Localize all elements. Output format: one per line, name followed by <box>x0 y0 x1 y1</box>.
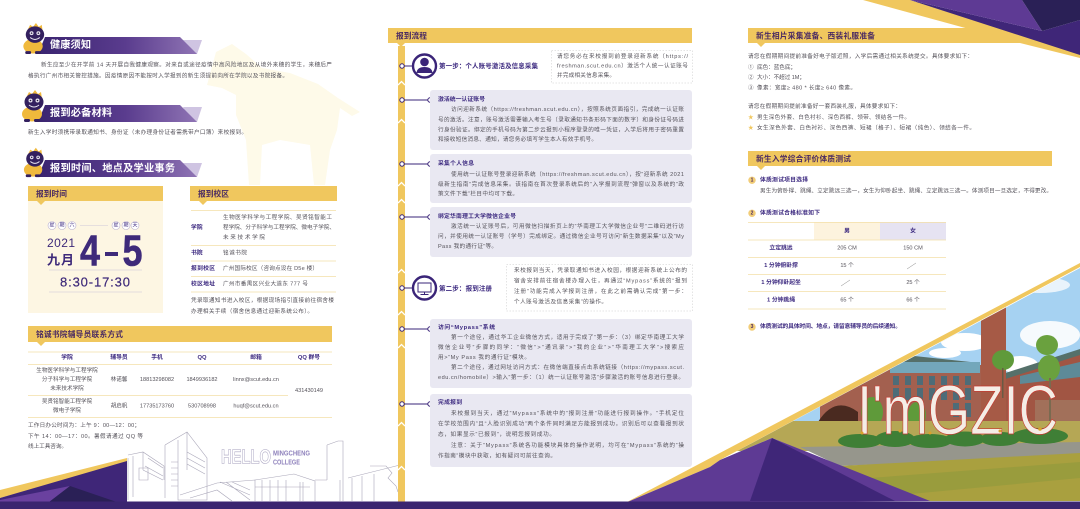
card: 完成报到 <box>430 394 692 467</box>
heading: 报到必备材料 <box>22 90 202 122</box>
panel: 报到校区: 凭录取通知书进入校区，根据现场指引直接前往宿舍楼 <box>191 296 334 304</box>
weekdays: 星 <box>49 222 55 228</box>
contact table: 胡启帆 <box>111 402 128 410</box>
step 2 title: 第二步：报到注册 <box>439 284 492 292</box>
card: 访问 Mypass 系统 <box>430 319 692 388</box>
contact table: 学院 <box>61 353 73 361</box>
watermark: horse <box>207 44 360 185</box>
right panel <box>748 28 1052 331</box>
suit requirements: 男生深色外套、白色衬衫、深色西裤、领带、领结各一件。 <box>757 113 910 121</box>
contact table: 林诺馨 <box>111 375 128 383</box>
office hours note: 下午 14：00—17：00。暑假请通过 QQ 等 <box>28 432 143 440</box>
item 1: 1 <box>751 177 754 183</box>
contact table: linnx@scut.edu.cn <box>233 377 279 383</box>
step 1 note <box>552 50 692 83</box>
card: 完成报到: 完成报到 <box>438 398 462 406</box>
bottom-left corner shapes <box>0 458 137 509</box>
card: 完成报到: 注意：关于“Mypass”系统各功能模块具体的操作说明，均可在“Mypass”系统的“操 <box>451 441 684 449</box>
panel: 报到时间: 8:30-17:30 <box>60 274 130 290</box>
contact table <box>28 352 332 418</box>
center panel <box>388 28 692 502</box>
card: 完成报到: 态，如果显示“已报到”，说明您报到成功。 <box>438 430 555 438</box>
office hours note: 线上工具咨询。 <box>28 442 67 450</box>
panel: 报到校区: 学院 <box>191 223 203 231</box>
weekdays: 星 <box>113 222 119 228</box>
fitness standards table: 25 个 <box>906 279 920 286</box>
photo requirements: ② <box>748 73 754 81</box>
HELLO outline lettering: HELLO <box>221 446 271 468</box>
panel: 报到校区: 程学院、分子科学与工程学院、微电子学院、 <box>223 223 335 231</box>
weekdays <box>48 222 139 230</box>
suit requirements <box>748 102 975 132</box>
card: 完成报到: 作指南”模块中获取，如有疑问可前往查询。 <box>438 452 556 460</box>
card: 采集个人信息 <box>430 154 692 203</box>
fitness standards table <box>748 222 946 309</box>
contact table: 生物医学科学与工程学院 <box>36 366 98 374</box>
heading: 报到时间、地点及学业事务 <box>24 148 202 177</box>
campus photo <box>737 268 1080 501</box>
card: 绑定华南理工大学微信企业号 <box>430 207 692 257</box>
card: 绑定华南理工大学微信企业号: 问，并使用统一认证账号（学号）完成绑定。通过微信企业号可访问“新生数据采集”以及“My <box>438 232 684 240</box>
contact table: huqf@scut.edu.cn <box>233 404 279 410</box>
panel: 报到时间: 九月 <box>47 252 74 268</box>
panel: 报到时间 <box>28 186 163 313</box>
card: 采集个人信息: 级新生指南”完成信息采集。该指南在首次登录系统后的“入学报到流程”弹窗以及系统的“政 <box>438 180 684 188</box>
heading: 新生相片采集准备、西装礼服准备 <box>748 28 1025 47</box>
card: 访问 Mypass 系统: 微信企业号”步骤的同学：“微信”>“通讯录”>“我的企业”>“华南理工大学”>搜索应 <box>438 343 684 351</box>
card: 访问 Mypass 系统: 第二个途径，通过网址访问方式：在微信端直接点击系统链接（https://mypass.scut. <box>451 363 684 371</box>
card: 完成报到: 在学校范围内”且“人脸识别成功”两个条件同时满足方能报到成功，识别后可以查看报到状 <box>438 420 684 428</box>
step 1 note: freshman.scut.edu.cn）激活个人统一认证账号 <box>557 62 688 70</box>
health text: 新生应至少在开学前 14 天开展自我健康观察。对来自或途径疫情中高风险地区及从境外来穗的学生，来穗后严 <box>41 60 332 68</box>
step 2 note: 个人账号激活及信息采集”的操作。 <box>514 298 607 306</box>
materials text: 新生入学时须携带录取通知书、身份证（未办理身份证者需携带户口簿）来校报到。 <box>28 128 247 136</box>
photo requirements: 像素：宽度≥ 480 * 长度≥ 640 像素。 <box>757 84 856 92</box>
contact table: 辅导员 <box>110 353 128 361</box>
item 3: 3 <box>751 324 754 330</box>
timeline strip <box>398 46 432 502</box>
card: 绑定华南理工大学微信企业号: 绑定华南理工大学微信企业号 <box>438 212 516 220</box>
item 3 <box>748 322 901 331</box>
date: 4–5: 4 <box>80 226 100 276</box>
panel: 报到校区: 报到校区 <box>191 264 215 272</box>
office hours note <box>28 421 143 450</box>
card: 完成报到: 来校报到当天，通过“Mypass”系统中的“报到注册”功能进行报到操作。“手机定位 <box>451 409 684 417</box>
card: 激活统一认证账号 <box>430 90 692 150</box>
suit requirements: 请您在假期期间提前准备好一套西装礼服，具体要求如下： <box>748 102 901 110</box>
left panel <box>22 23 337 450</box>
card: 绑定华南理工大学微信企业号: Pass 我的通行证”等。 <box>438 242 497 250</box>
photo requirements: 请您在假期期间提前准备好电子版近照，入学后需通过相关系统提交。具体要求如下： <box>748 52 973 60</box>
photo requirements: ③ <box>748 84 754 92</box>
panel: 报到校区: 办理相关手续（宿舍信息通过迎新系统公布）。 <box>191 307 313 315</box>
panel: 报到校区: 广州市番禺区兴业大道东 777 号 <box>223 280 308 288</box>
contact table: 1849936182 <box>186 377 218 383</box>
MINGCHENG COLLEGE: MINGCHENG <box>273 448 310 458</box>
step 1 note: 请您务必在来校报到前登录迎新系统（https:// <box>557 52 688 60</box>
step 1 title: 第一步：个人账号激活及信息采集 <box>439 61 538 70</box>
date: 4–5: 5 <box>122 226 142 276</box>
icon: monitor <box>413 276 436 300</box>
fitness standards table: 立定跳远 <box>769 244 793 252</box>
bottom band <box>0 502 1080 509</box>
item 2: 2 <box>751 210 754 216</box>
panel: 铭诚书院辅导员联系方式 <box>28 326 332 450</box>
panel: 报到校区: 铭诚书院 <box>223 248 247 256</box>
icon: person <box>413 54 436 78</box>
heading: 健康须知 <box>23 23 202 54</box>
weekdays: 六 <box>69 222 75 228</box>
suit requirements: 女生深色外套、白色衬衫、深色西裤、短裙（格子）、短裙（纯色）、领结各一件。 <box>757 124 975 132</box>
item 1: 男生为俯卧撑、跳绳、立定跳远三选一，女生为仰卧起坐、跳绳、立定跳远三选一。体测项目一旦选定，不得更改。 <box>760 186 1052 194</box>
panel: 报到校区: 报到校区 <box>198 188 229 198</box>
suit requirements: ★ <box>748 126 754 132</box>
card: 访问 Mypass 系统: 访问“Mypass”系统 <box>438 323 495 331</box>
MINGCHENG COLLEGE <box>273 448 310 466</box>
office hours note: 工作日办公时间为：上午 9：00—12：00； <box>28 421 140 429</box>
heading: 报到流程: 报到流程 <box>396 30 427 40</box>
card: 激活统一认证账号: 访问迎新系统（https://freshman.scut.edu.cn），按照系统页面指引，完成统一认证账 <box>451 105 684 113</box>
fitness standards table: 65 个 <box>840 296 854 304</box>
card: 访问 Mypass 系统: edu.cn/homobile）>输入“第一步：（1）统一认证账号激活”步骤激活的账号信息进行登录。 <box>438 373 684 381</box>
step 2 note: 来校报到当天，凭录取通知书进入校园，根据迎新系统上公布的 <box>514 266 687 274</box>
contact table: 未来技术学院 <box>50 384 84 392</box>
city line art <box>128 432 400 501</box>
MINGCHENG COLLEGE: COLLEGE <box>273 458 300 466</box>
step 2 note: 注册”功能完成入学报到注册，在此之前需确认完成“第一步： <box>514 287 687 295</box>
contact table: 18813298082 <box>140 377 174 383</box>
panel: 报到时间: 2021 <box>47 236 75 250</box>
health text: 格执行广州市相关管控措施。因疫情原因不能按时入学报到的新生须提前向所在学院以及书院报备。 <box>28 71 288 79</box>
weekdays: 天 <box>132 222 138 228</box>
fitness standards table: 男 <box>844 228 850 234</box>
contact table: 分子科学与工程学院 <box>42 375 93 383</box>
contact table: QQ <box>197 355 207 361</box>
card: 访问 Mypass 系统: 用>“My Pass 我的通行证”模块。 <box>438 353 530 361</box>
heading: 健康须知: 健康须知 <box>50 38 91 51</box>
heading: 报到流程 <box>388 28 692 47</box>
item 3: 体质测试的具体时间、地点，请留意辅导员的后续通知。 <box>760 322 901 330</box>
photo requirements <box>748 52 973 92</box>
heading: 新生相片采集准备、西装礼服准备: 新生相片采集准备、西装礼服准备 <box>756 30 875 40</box>
date: 4–5 <box>80 226 142 276</box>
contact table: 431430149 <box>295 388 323 394</box>
panel: 报到校区: 未来技术学院 <box>223 233 265 241</box>
card: 采集个人信息: 采集个人信息 <box>438 159 474 167</box>
item 1 <box>748 175 1052 194</box>
contact table: QQ 群号 <box>298 353 320 361</box>
suit requirements: ★ <box>748 115 754 121</box>
fitness standards table: 15 个 <box>840 262 854 269</box>
contact table: 微电子学院 <box>53 406 81 414</box>
panel: 报到校区 <box>190 186 337 315</box>
fitness standards table: 205 CM <box>837 246 857 252</box>
step 2 note <box>506 264 692 311</box>
card: 激活统一认证账号: 激活统一认证账号 <box>438 95 485 103</box>
step 2 note: 宿舍安排前往宿舍楼办理入住，再通过“Mypass”系统的“报到 <box>514 276 687 284</box>
panel: 铭诚书院辅导员联系方式: 铭诚书院辅导员联系方式 <box>36 329 123 339</box>
photo requirements: 大小：不超过 1M； <box>757 73 805 81</box>
card: 采集个人信息: 策文件下载”栏目中均可下载。 <box>438 190 518 198</box>
card: 访问 Mypass 系统: 第一个途径，通过华工企业微信方式，适用于完成了“第一步：（3）绑定华南理工大学 <box>451 333 684 341</box>
fitness standards table: 1 分钟跳绳 <box>767 296 795 304</box>
step 1 note: 并完成相关信息采集。 <box>557 71 615 79</box>
contact table: 手机 <box>151 353 163 361</box>
heading: 新生入学综合评价体质测试 <box>748 151 1052 170</box>
fitness standards table: 1 分钟俯卧撑 <box>764 261 798 269</box>
card: 绑定华南理工大学微信企业号: 激活统一认证账号后，可用微信扫描折页上的“华南理工大学微信企业号”二维码进行访 <box>451 222 684 230</box>
item 2: 体质测试合格标准如下 <box>760 208 820 216</box>
fitness standards table: 女 <box>910 226 916 234</box>
panel: 报到校区: 书院 <box>191 248 203 256</box>
panel: 报到校区: 校区地址 <box>191 280 215 288</box>
panel: 报到时间: 报到时间 <box>36 188 67 198</box>
heading: 报到必备材料: 报到必备材料 <box>50 106 112 119</box>
photo requirements: ① <box>748 63 754 71</box>
card: 采集个人信息: 使用统一认证账号登录迎新系统（https://freshman.scut.edu.cn），按“迎新系统 2021 <box>451 170 684 178</box>
photo requirements: 底色：蓝色底； <box>757 63 796 71</box>
weekdays: 期 <box>59 222 65 228</box>
fitness standards table: 66 个 <box>906 296 920 304</box>
heading: 新生入学综合评价体质测试: 新生入学综合评价体质测试 <box>756 154 851 164</box>
item 2 <box>748 208 820 217</box>
item 1: 体质测试项目选择 <box>760 175 808 183</box>
contact table: 吴贤铭智能工程学院 <box>42 397 93 405</box>
top-right corner shapes <box>863 0 1080 58</box>
contact table: 530708998 <box>188 404 216 410</box>
bottom-right corner shapes <box>625 263 1080 503</box>
fitness standards table: 150 CM <box>903 246 923 252</box>
panel: 报到校区: 生物医学科学与工程学院、吴贤铭智能工 <box>223 213 332 221</box>
panel: 报到校区: 广州国际校区（咨询点设在 D5e 楼） <box>223 264 318 272</box>
contact table: 17735173760 <box>140 404 174 410</box>
contact table: 邮箱 <box>250 353 262 361</box>
card: 激活统一认证账号: 行身份验证。绑定的手机号码为第二步云报到小程序登录的唯一凭证，入学后将用于密码重置 <box>438 126 684 134</box>
card: 激活统一认证账号: 和接收短信消息、通知，请您务必填写学生本人有效手机号。 <box>438 135 597 143</box>
card: 激活统一认证账号: 号的激活。注意，账号激活需要输入考生号（录取通知书条形码下面的数字）和身份证号码进 <box>438 116 684 124</box>
fitness standards table: 1 分钟仰卧起坐 <box>761 278 801 286</box>
weekdays: 期 <box>123 222 129 228</box>
health text <box>28 60 332 79</box>
heading: 报到时间、地点及学业事务: 报到时间、地点及学业事务 <box>50 161 175 174</box>
